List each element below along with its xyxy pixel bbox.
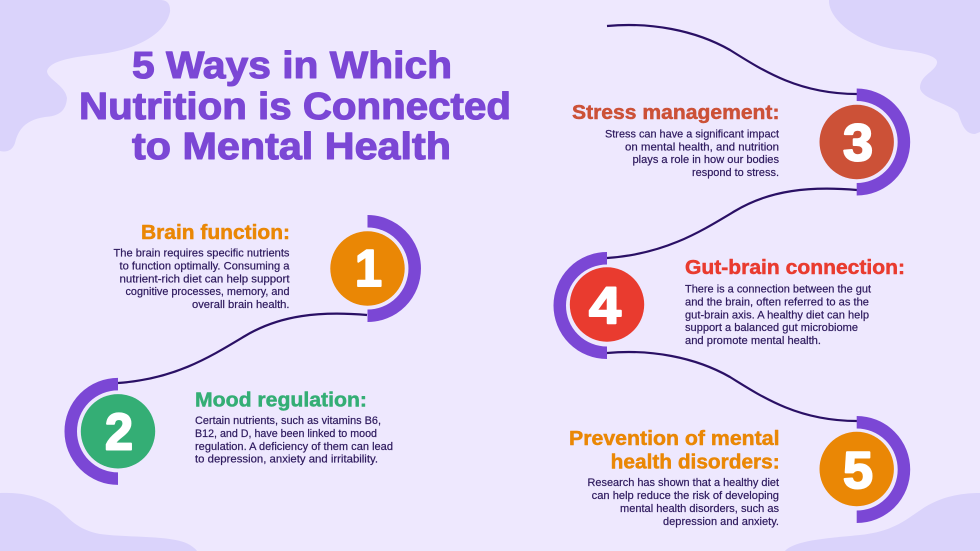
body 3: on mental health, and nutrition [625, 141, 779, 153]
background blob: bottom left [0, 493, 197, 551]
connector line: step 3 to step 4 [607, 189, 857, 258]
step 5: prevention of mental health disorders [569, 422, 904, 528]
connector line: step 1 to step 2 [118, 314, 367, 383]
body 5: mental health disorders, such as [620, 503, 780, 515]
ring 1 [368, 221, 415, 316]
body 4: There is a connection between the gut [685, 284, 871, 296]
badge 3 [820, 105, 894, 179]
background blob: top left [0, 0, 170, 151]
body 4 [685, 284, 871, 347]
heading 5: health disorders: [611, 450, 780, 474]
body 5: can help reduce the risk of developing [592, 490, 779, 502]
body 2: Certain nutrients, such as vitamins B6, [195, 415, 381, 427]
body 1: nutrient-rich diet can help support [120, 273, 290, 285]
body 2 [195, 415, 393, 466]
badge 4: 4 [589, 278, 621, 336]
heading 5 [569, 427, 780, 474]
badge 1 [330, 231, 405, 306]
badge 5 [820, 432, 894, 506]
badge 5: 5 [843, 442, 873, 500]
ring 4 [560, 258, 607, 353]
body 2: regulation. A deficiency of them can lead [195, 441, 393, 453]
heading 1: Brain function: [141, 221, 290, 244]
body 1: cognitive processes, memory, and [126, 286, 290, 298]
heading 2: Mood regulation: [195, 388, 367, 412]
badge 3: 3 [843, 114, 873, 172]
body 4: gut-brain axis. A healthy diet can help [685, 309, 869, 321]
body 4: and promote mental health. [685, 335, 821, 347]
connector line: start to step 3 [607, 25, 857, 94]
body 2: B12, and D, have been linked to mood [195, 428, 377, 440]
title: 5 Ways in Which [132, 45, 452, 87]
ring 3 [857, 95, 904, 189]
body 1 [114, 248, 290, 311]
body 1: to function optimally. Consuming a [120, 260, 290, 272]
body 3: plays a role in how our bodies [632, 154, 780, 166]
ring 2 [71, 384, 118, 479]
body 4: support a balanced gut microbiome [685, 322, 858, 334]
step 1: brain function [114, 221, 415, 316]
connector line: step 4 to step 5 [607, 352, 857, 421]
step 2: mood regulation [71, 384, 393, 479]
body 2: to depression, anxiety and irritability. [195, 454, 378, 466]
body 3: Stress can have a significant impact [605, 128, 779, 140]
ring 5 [857, 422, 904, 517]
title: to Mental Health [132, 126, 451, 168]
body 3 [605, 128, 780, 179]
badge 1: 1 [355, 240, 382, 298]
body 4: and the brain, often referred to as the [685, 296, 869, 308]
badge 2: 2 [105, 404, 133, 462]
title [79, 45, 511, 168]
body 3: respond to stress. [692, 167, 779, 179]
background blob: top right [829, 0, 980, 134]
heading 5: Prevention of mental [569, 427, 780, 450]
body 1: The brain requires specific nutrients [114, 248, 290, 260]
step 3: stress management [572, 95, 904, 189]
title: Nutrition is Connected [79, 86, 511, 128]
body 5 [588, 477, 780, 528]
heading 4: Gut-brain connection: [685, 256, 905, 279]
heading 3: Stress management: [572, 101, 780, 124]
body 5: Research has shown that a healthy diet [588, 477, 779, 489]
badge 2 [81, 394, 155, 468]
badge 4 [570, 267, 644, 342]
body 1: overall brain health. [192, 299, 290, 311]
background blob: bottom right [785, 493, 980, 551]
body 5: depression and anxiety. [663, 516, 779, 528]
step 4: gut-brain connection [560, 256, 905, 353]
